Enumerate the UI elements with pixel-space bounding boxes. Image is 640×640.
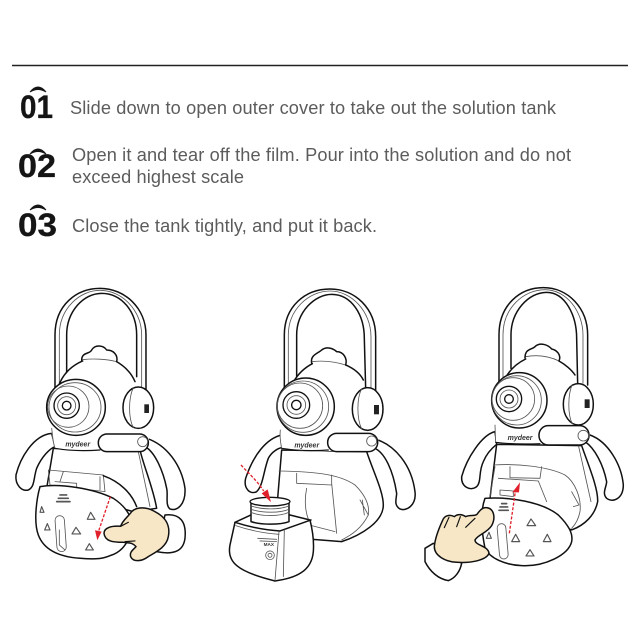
illustration: step 1 robot with cover sliding down: mydeer — [65, 442, 91, 449]
step 2 text: Open it and tear off the film. Pour into the solution and do not — [72, 145, 571, 165]
solution bottle: MAX — [264, 542, 275, 547]
hand pushing cover — [434, 508, 494, 562]
illustration: step 3 robot with cover being replaced — [425, 288, 623, 581]
step 3 text: Close the tank tightly, and put it back. — [72, 216, 377, 236]
illustration: step 2 robot with removed bottle: mydeer — [294, 442, 320, 449]
illustration: step 2 robot with removed bottle — [229, 289, 415, 581]
solution bottle — [229, 497, 314, 581]
illustration: step 3 robot with cover being replaced: mydeer — [508, 435, 534, 442]
step 2 number: 02 — [18, 148, 56, 184]
step 1 number: 01 — [20, 89, 53, 125]
hand pointing at cover — [104, 508, 169, 561]
step 2 text: exceed highest scale — [72, 167, 244, 187]
illustration: step 1 robot with cover sliding down — [16, 288, 185, 561]
step 1 text: Slide down to open outer cover to take out the solution tank — [70, 98, 557, 118]
step 3 number: 03 — [18, 207, 57, 243]
hand cuff — [157, 515, 185, 553]
step 2 text — [72, 145, 571, 187]
hand cuff — [425, 543, 462, 581]
